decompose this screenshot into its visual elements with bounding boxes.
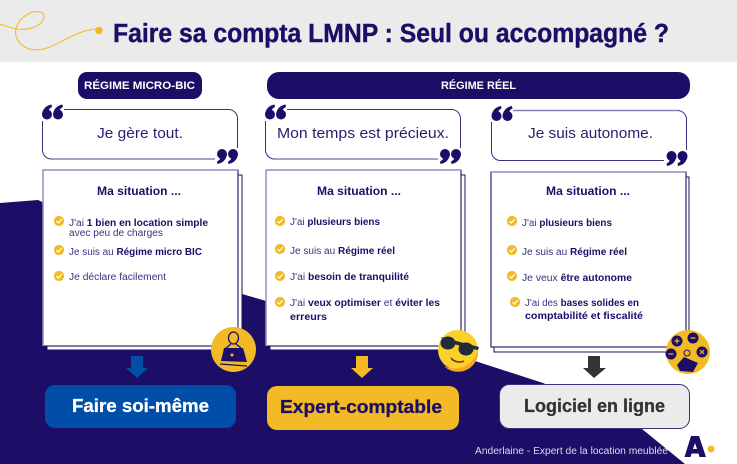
arrow: yellow: [351, 356, 373, 378]
icon: sunglasses emoji: [438, 330, 479, 372]
panel: card expert-comptable: [266, 170, 465, 350]
icon: person with laptop: [211, 327, 256, 372]
panel: card logiciel: comptabilité et fiscalité: [525, 311, 643, 322]
header band: [0, 0, 737, 62]
panel: card logiciel: Ma situation ...: [546, 186, 630, 198]
arrow: blue: [126, 356, 148, 378]
icon: maths symbols: [666, 330, 710, 374]
panel: card expert-comptable: J'ai besoin de tranquilité: [290, 272, 409, 283]
panel: card logiciel: [491, 172, 689, 352]
footer text: Anderlaine - Expert de la location meublée: [475, 446, 668, 457]
panel: card micro-BIC: avec peu de charges: [69, 228, 163, 239]
button: expert-comptable: [267, 386, 459, 430]
panel: card micro-BIC: [43, 170, 242, 350]
button: faire soi-même: [45, 385, 236, 428]
quote: mon temps est précieux: Mon temps est précieux.: [277, 125, 449, 142]
panel: card expert-comptable: J'ai veux optimiser et éviter les: [290, 298, 440, 309]
button: expert-comptable: Expert-comptable: [280, 396, 442, 417]
pill: régime micro-BIC: [78, 72, 202, 99]
quote: je gère tout: Je gère tout.: [97, 125, 183, 142]
quote: je gère tout: [40, 103, 240, 165]
arrow: dark grey: [583, 356, 606, 378]
pill: régime réel: [267, 72, 690, 99]
panel: card micro-BIC: Je déclare facilement: [69, 272, 166, 283]
panel: card micro-BIC: Je suis au Régime micro BIC: [69, 247, 202, 258]
quote: je suis autonome: Je suis autonome.: [528, 125, 653, 142]
button: logiciel en ligne: [500, 384, 690, 428]
quote: mon temps est précieux: [263, 103, 463, 165]
panel: card logiciel: J'ai des bases solides en: [525, 298, 639, 309]
quote: je suis autonome: [489, 104, 689, 167]
panel: card micro-BIC: Ma situation ...: [97, 186, 181, 198]
logo: [684, 436, 714, 457]
panel: card expert-comptable: Ma situation ...: [317, 186, 401, 198]
panel: card logiciel: Je suis au Régime réel: [522, 247, 627, 258]
pill: régime micro-BIC: RÉGIME MICRO-BIC: [84, 79, 195, 92]
background dark shape: [0, 200, 685, 464]
panel: card logiciel: J'ai plusieurs biens: [522, 218, 612, 229]
panel: card logiciel: Je veux être autonome: [522, 273, 632, 284]
panel: card expert-comptable: erreurs: [290, 312, 327, 323]
panel: card expert-comptable: Je suis au Régime réel: [290, 246, 395, 257]
title: Faire sa compta LMNP : Seul ou accompagné ?: [113, 20, 669, 48]
button: logiciel en ligne: Logiciel en ligne: [524, 395, 665, 416]
pill: régime réel: RÉGIME RÉEL: [441, 79, 516, 92]
button: faire soi-même: Faire soi-même: [72, 395, 209, 416]
panel: card micro-BIC: J'ai 1 bien en location simple: [69, 218, 208, 229]
panel: card expert-comptable: J'ai plusieurs biens: [290, 217, 380, 228]
